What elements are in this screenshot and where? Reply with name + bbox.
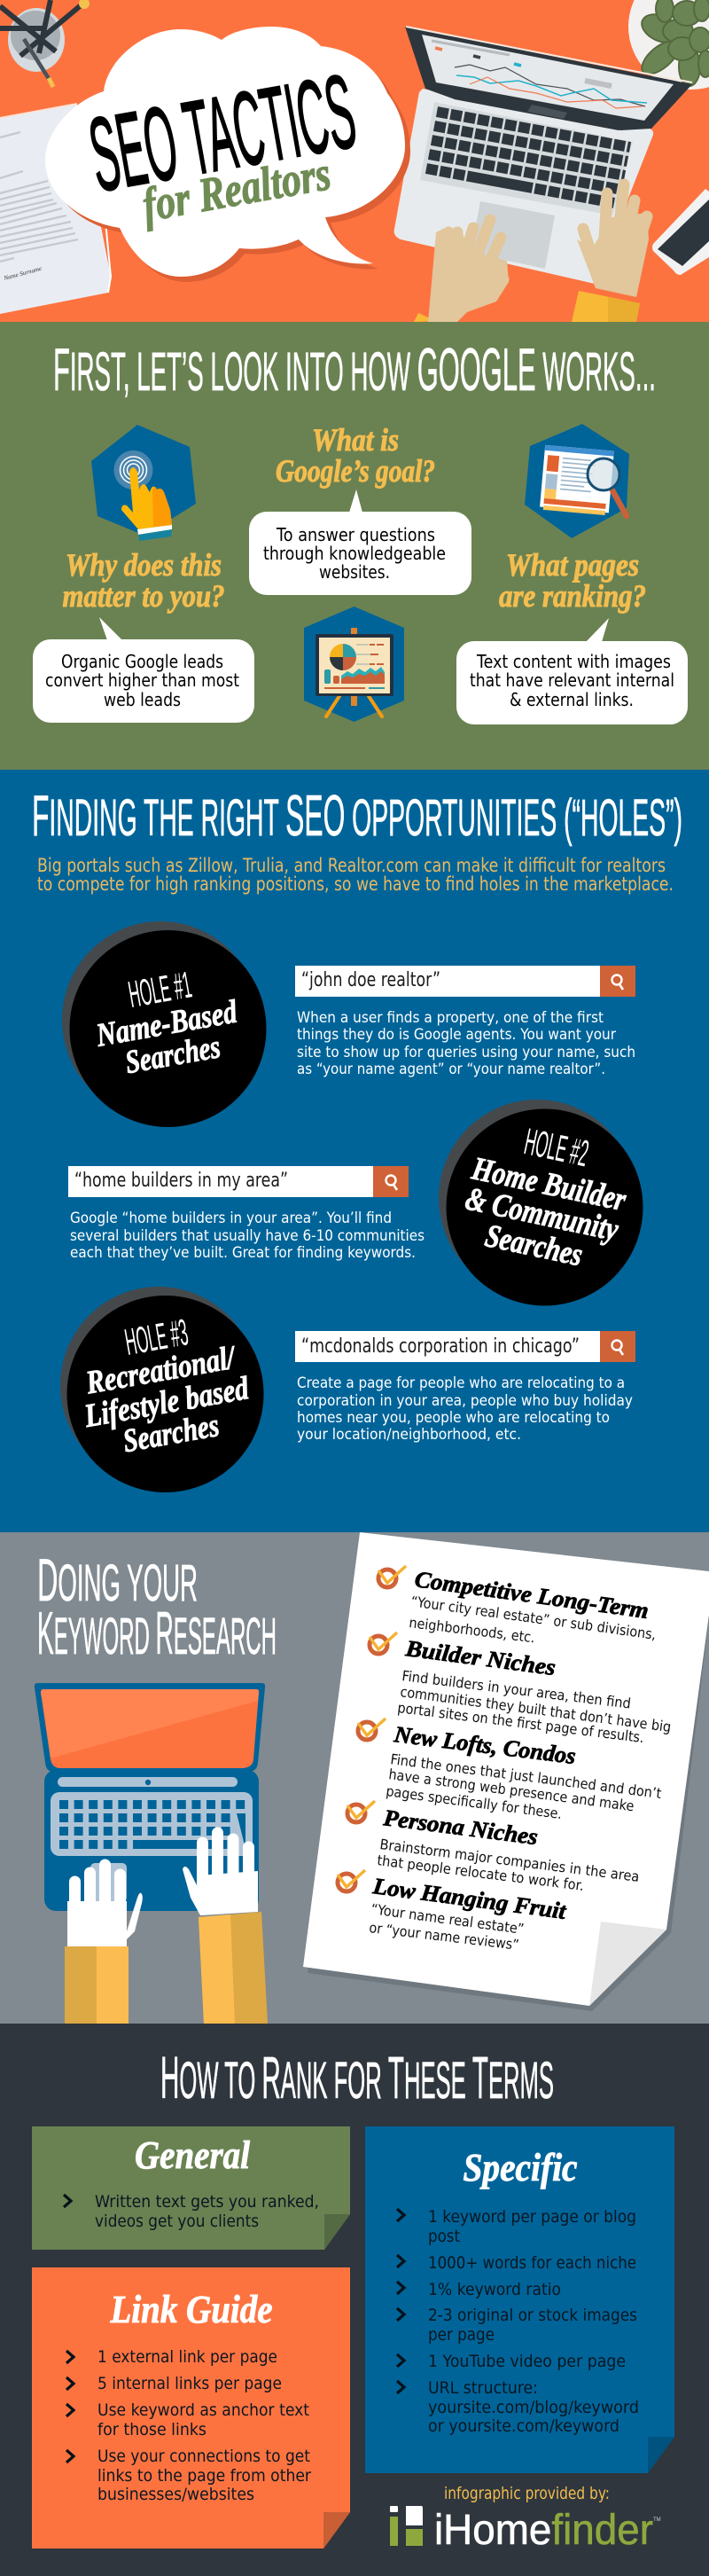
callout: why it matters answer: web leads [104,689,181,710]
text: hole 2 description: Google “home builders in your area”. You’ll find [70,1210,392,1227]
card: link guide: 1 external link per page [97,2347,277,2367]
icon: phone [652,189,709,275]
question: what pages are ranking: are ranking? [499,578,646,614]
intro text [37,855,674,895]
card: specific: Specific [463,2146,578,2189]
card: specific: 1 YouTube video per page [428,2352,626,2371]
text: hole 3 description: homes near you, people who are relocating to [297,1409,610,1427]
item: competitive long-term [409,1566,657,1646]
item: builder niches: Builder Niches [403,1635,557,1680]
right hand and sleeve [183,1833,268,2024]
callout: ranking pages answer: Text content with images [476,651,671,672]
card: specific: 1000+ words for each niche [428,2253,636,2273]
text: hole 2 description: several builders that usually have 6-10 communities [70,1227,425,1245]
hole 2 badge: Home Builder [468,1150,629,1218]
card: link guide: Use keyword as anchor text [97,2400,309,2420]
hole 2 badge: Searches [482,1218,586,1273]
left hand and sleeve [65,1865,143,2024]
hole 2 badge: & Community [463,1181,622,1249]
signature: Name Surname [2,265,43,282]
item: builder niches: Find builders in your area, then find [401,1667,632,1712]
icon: document [0,104,111,314]
card: specific: 2-3 original or stock images [428,2306,637,2325]
callout: ranking pages answer [456,618,688,724]
heading [37,1546,277,1667]
card: specific: URL structure: [428,2378,538,2398]
item: persona niches: that people relocate to work for. [377,1852,585,1894]
hole 1 badge [62,921,266,1127]
heading: KEYWORD RESEARCH [37,1600,277,1667]
card: link guide: links to the page from other [97,2466,311,2486]
callout: ranking pages answer: that have relevant internal [470,669,674,691]
item: persona niches: Persona Niches [381,1805,540,1850]
text: hole 3 description: your location/neighborhood, etc. [297,1426,521,1444]
item: low hanging fruit [369,1873,568,1954]
callout: why it matters answer: convert higher than most [45,669,239,691]
text: hole 3 description: Create a page for people who are relocating to a [297,1374,625,1392]
item: builder niches [397,1635,672,1746]
text: hole 2 description: each that they’ve built. Great for finding keywords. [70,1244,416,1262]
logo: iHomefinder: TM [653,2517,661,2523]
question: why does this matter [62,547,225,614]
text: hole 3 description: corporation in your area, people who buy holiday [297,1392,633,1410]
item: new lofts, condos: have a strong web presence and make [387,1766,635,1814]
card: link guide: Use your connections to get [97,2447,310,2466]
question: why does this matter: matter to you? [62,578,225,614]
hole 1 badge: Searches [122,1029,223,1081]
panel: how to rank [0,2024,709,2576]
card: specific: or yoursite.com/keyword [428,2416,619,2436]
subtitle: for Realtors [138,146,334,231]
item: new lofts, condos: New Lofts, Condos [392,1721,577,1769]
hole 2 badge: HOLE #2 [521,1120,592,1174]
callout: why it matters answer: Organic Google leads [61,651,223,672]
card: general: General [135,2134,251,2177]
card: specific: post [428,2227,460,2246]
card: specific: per page [428,2325,495,2345]
search bar: john doe realtor [295,966,635,997]
text: hole 1 description: site to show up for queries using your name, such [297,1044,635,1061]
text: hole 2 description [70,1210,425,1262]
hole 1 badge: HOLE #1 [125,963,195,1015]
callout: why it matters answer [33,617,254,723]
icon: laptop [394,27,692,284]
item: low hanging fruit: or “your name reviews” [369,1919,520,1954]
speech bubble [45,27,410,282]
item: builder niches: communities they built that don’t have big [399,1683,672,1735]
hole 3 badge: Recreational/ [82,1339,240,1402]
hole 2 badge [439,1100,643,1305]
question: what pages are ranking: What pages [506,547,639,583]
card: specific [365,2126,674,2473]
callout: Google's goal answer: To answer questions [276,524,435,545]
text: hole 1 description: things they do is Google agents. You want your [297,1026,616,1044]
card: general: videos get you clients [95,2212,259,2231]
search bar: mcdonalds: “mcdonalds corporation in chicago” [301,1335,580,1358]
text: hole 3 description [297,1374,633,1444]
hole 3 badge [60,1287,264,1492]
card: specific: 1 keyword per page or blog [428,2207,636,2227]
card: link guide: businesses/websites [97,2485,254,2504]
card: link guide: Link Guide [110,2288,273,2331]
icon: hexagon browser page with magnifier [525,424,629,538]
logo: iHomefinder: iHomefinder [434,2507,653,2554]
search bar: home builders [68,1166,409,1197]
icon: pencil cup [0,0,90,87]
text: hole 1 description: When a user finds a property, one of the first [297,1009,604,1027]
hole 1 badge: Name-Based [93,994,240,1054]
question: what is Google's goal: What is [312,422,399,458]
card: general: Written text gets you ranked, [95,2192,319,2212]
search bar: home builders: “home builders in my area” [74,1170,288,1192]
check icon 2 [370,1633,397,1654]
callout: ranking pages answer: & external links. [510,689,634,710]
item: builder niches: portal sites on the first page of results. [397,1699,645,1746]
panel: checklist paper [303,1532,709,2011]
callout: Google's goal answer: through knowledgeable [263,543,446,564]
card: link guide: for those links [97,2420,206,2439]
hole 3 badge: Lifestyle based [82,1370,252,1435]
card: link guide [32,2267,350,2549]
check icon 3 [358,1719,386,1740]
icon: hexagon pointer hand [91,425,196,541]
panel: how Google works [0,322,709,770]
item: persona niches [377,1805,641,1894]
card: link guide: 5 internal links per page [97,2374,282,2393]
icon: laptop with hands [35,1683,268,2024]
hole 3 badge: Searches [121,1407,222,1460]
check icon 4 [347,1801,375,1822]
icon: left hand [414,220,509,322]
question: what is Google's goal: Google’s goal? [276,453,435,489]
card: specific: 1% keyword ratio [428,2280,561,2299]
search bar: mcdonalds [295,1331,635,1362]
hole 3 badge: HOLE #3 [121,1311,191,1363]
question: what is Google's goal [276,422,435,489]
text: hole 1 description [297,1009,635,1078]
check icon 5 [338,1870,365,1891]
text: hole 1 description: as “your name agent” or “your name realtor”. [297,1061,605,1078]
panel: hero header [0,0,709,322]
question: why does this matter: Why does this [66,547,222,583]
callout: Google's goal answer [249,489,471,595]
item: new lofts, condos: pages specifically for these. [385,1782,563,1822]
icon: plant [628,0,709,90]
check icon 1 [378,1566,406,1587]
item: persona niches: Brainstorm major companies in the area [378,1836,641,1885]
panel: keyword research [0,1532,709,2024]
icon: right hand [572,184,649,322]
item: low hanging fruit: Low Hanging Fruit [370,1873,568,1924]
panel: finding SEO opportunities [0,770,709,1532]
item: low hanging fruit: “Your name real estate” [370,1900,525,1938]
item: competitive long-term: neighborhoods, etc. [409,1614,536,1646]
callout: Google's goal answer: websites. [319,561,390,583]
credit text: infographic provided by: [444,2484,610,2503]
heading: DOING YOUR [37,1546,198,1614]
icon: hexagon easel chart [304,607,404,722]
card: specific: yoursite.com/blog/keyword [428,2398,639,2417]
item: competitive long-term: “Your city real estate” or sub divisions, [409,1593,657,1643]
card: general [32,2126,350,2250]
item: competitive long-term: Competitive Long-Term [413,1566,651,1624]
question: what pages are ranking [499,547,646,614]
heading: HOW TO RANK FOR THESE TERMS [160,2045,554,2111]
item: new lofts, condos [385,1721,662,1822]
item: new lofts, condos: Find the ones that just launched and don’t [389,1750,662,1802]
search bar: john doe realtor: “john doe realtor” [301,969,440,991]
